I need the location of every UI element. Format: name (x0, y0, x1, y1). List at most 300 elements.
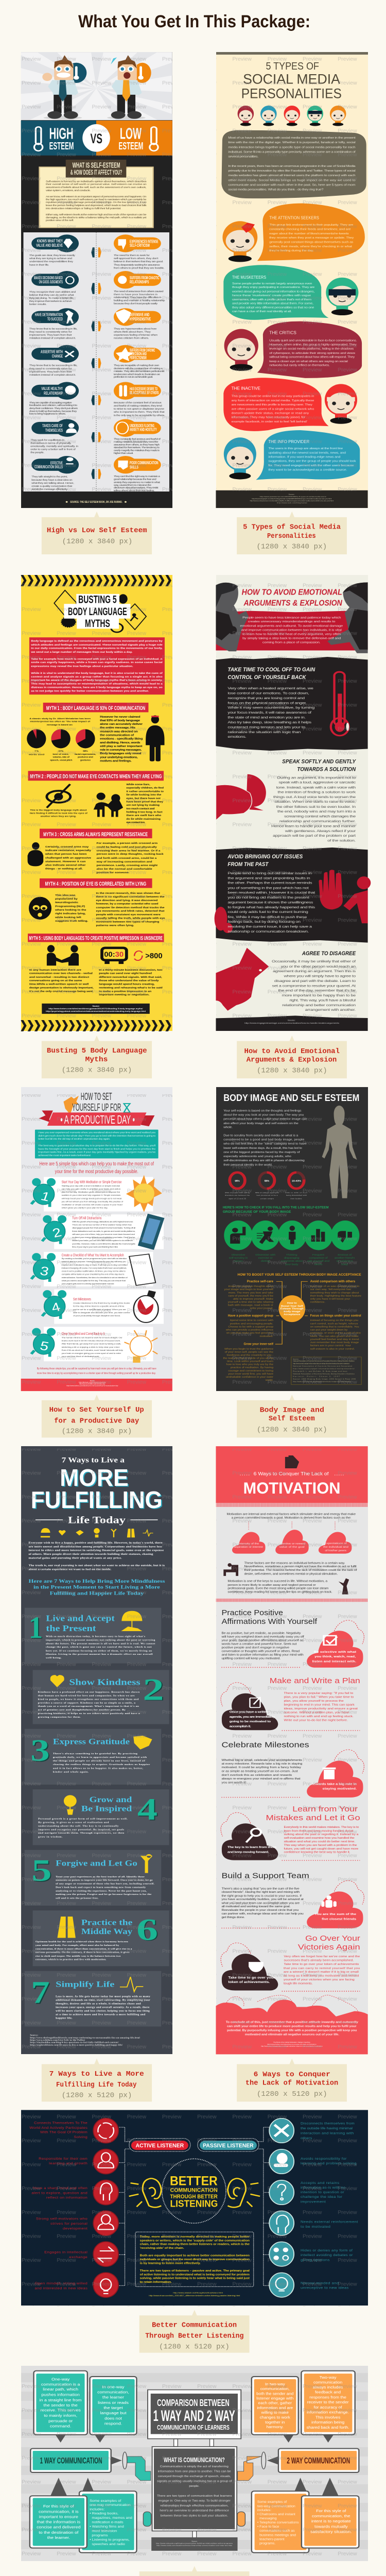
donut charts: 10-43% (292, 1180, 302, 1182)
green captions: Obsession with (255, 1254, 275, 1257)
intro blob: other more easily. Social Media brings us huge impact on the way we used to (228, 179, 356, 182)
active listener traits: and interested in new ideas (34, 2286, 87, 2290)
myth 1 (27, 703, 165, 762)
box: two-way style: satisfactory situation. (310, 2530, 352, 2534)
section: past issues: resolving the current issue, it can help save a (227, 924, 312, 928)
way 4: 4 (138, 1792, 159, 1827)
section: cool off: Very often when a heated argument arise, we (227, 686, 313, 690)
panel: busting 5 body language myths: MYTH 2 : PEOPLE DO NOT MAKE EYE CONTACTS WHEN THEY ARE LYING (30, 773, 162, 779)
green heading: GROUP BECAUSE OF YOUR BODY IMAGE (223, 1211, 291, 1214)
myth 5: people can send over eight hundred (99, 972, 152, 975)
myth 4: movement between two types of changing (96, 921, 159, 923)
boost diagram: of your inner-self, people can see the (225, 1351, 273, 1353)
green captions: exercise or (258, 1257, 273, 1260)
caption: high vs low: High vs Low Self Esteem (47, 527, 147, 534)
tip 2 (41, 1214, 165, 1250)
tip 5: The human mind is not meant to work for 8 hours straight. Our (62, 1336, 122, 1338)
icon row (41, 1528, 153, 1537)
bubble text: musketeers continued, critics, inactive, info provider: http://www.entrepreneur.com/socialmedia/the-6-different-types-of-social-media-users-which-one-are-you.html (250, 500, 334, 502)
section: speak softly: the intention of finding a solution to work (278, 790, 356, 794)
caption: fulfilling life (42, 2059, 152, 2102)
tip 2: tackled your tasks, you can set a little reward system to do whatever (72, 1240, 133, 1242)
caption: fulfilling life: Fulfilling Life Today (56, 2080, 136, 2089)
intro blob: In the recent years, there has been an enormous progression in the use of Social Media (228, 165, 356, 168)
heading: SOCIAL MEDIA (243, 71, 341, 87)
way 3: chasing the endless things to acquire. Gratitude makes us happier (53, 1764, 150, 1766)
active listener traits: Engages in intellectual (44, 2250, 87, 2254)
traits row 1 and 2: believe in themselves that they are good. (114, 261, 164, 263)
bubble text: musketeers continued, critics, inactive, info provider: for. They need engagement with the other users because (268, 464, 354, 467)
tip: learn from mistakes: future, you will not get caught down and have more (284, 1848, 359, 1851)
tip 2: you'd like. However, make a commitment to allocate the most energetic (72, 1243, 135, 1245)
traits rows 2 to 7: receive criticism from others. (114, 337, 149, 340)
source (149, 2292, 240, 2297)
section: agree to disagree: AGREE TO DISAGREE (302, 951, 356, 956)
way 1: about the future. The present moment is all we have and it is real. We cannot (46, 1643, 155, 1645)
box: one-way examples: • Watching films and (90, 2525, 124, 2529)
boost diagram: can put your weight down by (310, 1329, 348, 1331)
intro blob: time with the rise of the digital age. Whether it is purposeful, fanatical or lofty, social (228, 141, 356, 144)
box: two-way learner: communication, (260, 2386, 290, 2391)
active listener traits: alert to explore, question and (31, 2191, 87, 2195)
box: one-way style: to the destination of (39, 2530, 79, 2535)
traits rows 2 to 7: good relationship because the fear and (114, 478, 156, 481)
sign: title: COMMUNICATION OF LEARNERS (157, 2424, 230, 2432)
green captions: or celebrity's (337, 1260, 353, 1263)
myth 5 (28, 934, 164, 996)
conclusion clouds: The Book of the Global Motivation, Dialogs Coaching (273, 2041, 310, 2043)
heading: PERSONALITIES (241, 86, 342, 101)
section: past issues: could only adds fuel to the current burning (227, 910, 308, 914)
intro blob: media interaction brings together a specific type of social media personality for each (228, 146, 356, 149)
bubble text: musketeers continued, critics, inactive, info provider: doesn't update their status, exchange or read any (232, 412, 309, 415)
green heading: HERE'S HOW TO CHECK IF YOU FALL INTO THE LOW SELF-ESTEEM (223, 1206, 329, 1209)
intro dotted box: is by learning to listen more effectively. (140, 2262, 201, 2265)
boost diagram: Each one of us was created unique in (310, 1285, 359, 1288)
tip 1 (30, 1175, 162, 1212)
source box: http://www.forbes.com/sites/carolkinseygoman/2012/07/24/busting-5-body-language-myths/ (48, 1008, 143, 1010)
box: one-way definition: receive. This serves (40, 2408, 81, 2413)
box: one-way examples: • Listening to programs, (90, 2538, 130, 2541)
box: one-way definition: communication is a (41, 2382, 80, 2386)
box: two-way definition: information exchange. (307, 2410, 349, 2414)
traits row 1 and 2: MAKES DECISIONS BASED (34, 276, 63, 280)
myth 2: it rather uncomfortable to (126, 790, 164, 793)
myth 1: A classic study by Dr. Albert Mehabrian has been (29, 718, 91, 720)
explanatory text: person is more likely to scatter away and neglect personal or (227, 1584, 316, 1587)
intro text: their personal identity in the world. (223, 1164, 273, 1166)
tip 1: you off but refresh you from lethargy. Eventually, this practice of (62, 1200, 124, 1202)
traits rows 2 to 7: mistakes instead of complain about it. (29, 374, 76, 377)
title (31, 1456, 164, 1526)
traits rows 2 to 7: THEMSELVES (45, 428, 63, 433)
intro dotted box: to retain information. (140, 2280, 172, 2284)
bubble: attention seekers: they receive when they post a message or update. They (269, 236, 354, 240)
donut charts: their bodies (290, 1198, 302, 1199)
intro teal box: better but fall into the old trap of another unproductive day again. (38, 1138, 110, 1141)
myth 4: people with consistent eye movement were (96, 913, 161, 916)
tip: make a plan: beginning to end in your mind. This can spark (284, 1703, 355, 1706)
tip: learn from mistakes: learn from them and keep moving forward. Avoid (284, 1830, 353, 1833)
source box: Source: (92, 1006, 100, 1007)
myth 3: Certainly, crossed arms may (45, 846, 89, 849)
donut charts (225, 1173, 307, 1199)
tip: victories text: tough life moments. (284, 1982, 313, 1985)
explanatory text: Motivation is one of the keys to succeed in life. Without motivation, a (227, 1580, 328, 1583)
tip: make a plan: plan, you allow yourself to process the (284, 1700, 344, 1703)
way 1: here yet. If we continue focusing on either of them, we're merely living an (46, 1650, 152, 1652)
traits rows 2 to 7: TAKES CARE OF (42, 423, 63, 429)
tip 5: your brain re-energize giving you a new spurt of zest to enter (62, 1352, 121, 1354)
box: two-way examples: • Telephone conversations (257, 2521, 299, 2524)
tip: affirmations: listen and interact with. (312, 1660, 356, 1663)
passive listener traits: giving opinions (301, 2258, 330, 2262)
traits rows 2 to 7: standard for themselves. The tendency to (114, 447, 160, 449)
way 6 (33, 1910, 169, 1966)
title ribbon (39, 1091, 154, 1126)
traits rows 2 to 7: SKILLS (130, 465, 138, 469)
source box: National Association of Anorexia Nervosa and Associated (293, 1365, 352, 1367)
traits row 1 and 2: self-approval from others, they don't (114, 258, 159, 260)
myth 2: holding it too long. In fact (126, 811, 163, 814)
source box: Source: (191, 2540, 198, 2543)
box: one-way definition (34, 2371, 87, 2435)
bubble text: musketeers continued, critics, inactive, info provider: worried about giving out personal information to strangers, (232, 290, 315, 293)
tip: support team: five closest friends (322, 1918, 357, 1921)
icon: phone (138, 1214, 165, 1250)
intro text: Due to scrutiny from society and media on what is a (223, 1134, 299, 1137)
tip: victories text: yourself of your victories when you are facing (284, 1978, 355, 1981)
icon: clipboard (129, 1254, 155, 1285)
section: speak softly: the other follows suit to be even louder. In (276, 805, 356, 808)
way 4: Grow and (90, 1795, 132, 1804)
way 3: There's always something to be grateful for. By practicing (53, 1753, 138, 1755)
source box: http://www.study.com/academy/lesson/improving-communication-one-way-two-way (156, 2545, 232, 2546)
box: one-way learner: the target (103, 2406, 123, 2410)
intro and factor clouds: the individual and (323, 1546, 348, 1549)
title: FULFILLING (31, 1486, 163, 1513)
caption: body image: Self Esteem (269, 1415, 315, 1422)
intro red box: smile can signify happiness, while a frown can signify sadness. In some cases facial (31, 662, 163, 664)
title with road signs (54, 590, 146, 632)
tip 3: cross it out to positive reaffirmation. At times, you may not be able to (62, 1270, 126, 1272)
myth 1: emotions - specifically liking (100, 738, 143, 740)
box: what is communication: engage in: One-way or Two-way. To build stronger (159, 2500, 231, 2502)
myth 5: conversations going on at the same (29, 979, 82, 982)
tip: make a plan: There is a very popular saying: "If you fail to (284, 1692, 354, 1695)
boost diagram: Just remember that most body image (310, 1342, 359, 1344)
boost diagram: When you begin to trust the guidance (224, 1348, 273, 1350)
text block: what is self-esteem: into destructive relationships or failing to fulfil their full potential. (46, 208, 121, 210)
traits rows 2 to 7: RELATIONSHIP (44, 391, 63, 396)
bubble text: musketeers continued, critics, inactive, info provider: updating about the newest social trends, news, and (268, 451, 346, 454)
tip: learn from mistakes (221, 1805, 360, 1860)
way 4: Be Inspired (81, 1804, 132, 1814)
myth 3: person were in deep thoughts, rocking back (96, 853, 164, 856)
intro teal box: have the foresight of your process for the next day from start to finish and helps you to prioritize the (38, 1148, 156, 1150)
traits rows 2 to 7: order to carry a better self in front of (30, 448, 76, 451)
box: two-way examples: includes: (257, 2509, 271, 2512)
myth 5: and nonverbal - resulting in two distinct (29, 976, 89, 979)
passive listener pill (198, 2139, 259, 2151)
way 1: important, which is present moment; not sulking about the past or worrying (46, 1639, 155, 1641)
myth 2: While some liars, (126, 784, 150, 786)
explanatory text (223, 1562, 357, 1595)
box: one-way definition: persuade or (48, 2419, 73, 2423)
text block: what is self-esteem: Either way, self-esteem levels at the extreme high and low ends of the spectrum can be (46, 213, 147, 216)
boost diagram: heels. You can also groom and make (310, 1335, 359, 1338)
myth 2 (28, 771, 164, 824)
tip 3 (30, 1252, 155, 1286)
passive listener traits: Needs external reinforcement (301, 2220, 358, 2224)
boost diagram: our own way. Tell everyone has (310, 1289, 351, 1291)
traits rows 2 to 7: is the only way to be acceptable by others. (114, 414, 165, 417)
intro teal box: important tasks first. As a result, even if your day gets inevitably hijacked by urgent matters, you've (38, 1151, 156, 1154)
section: agree to disagree: Occasionally, it may be unlikely that either of (272, 959, 356, 963)
box: one-way examples: magazines, memos and (92, 2516, 132, 2520)
intro and factor clouds: of his/her peers (325, 1550, 346, 1552)
caption: better listening: Through Better Listening (145, 2332, 244, 2340)
box: two-way style: communication, the (312, 2514, 350, 2518)
way 3: kinder and whole again. (53, 1771, 89, 1773)
way 5: moments as points to improve your life forward. Once you've done, let go (56, 1879, 153, 1882)
myth 2: there are swift liars who (126, 815, 162, 817)
bubble text: musketeers continued, critics, inactive, info provider: leverage on social media platforms, hiding in the shadows (269, 347, 354, 350)
myth 1: motives and feelings. (100, 760, 132, 762)
boost diagram: Practice self-care (247, 1280, 273, 1283)
section: speak softly: speak with a loud, aggressive or sarcastic (278, 781, 356, 784)
section: past issues: argument because it shows the unwillingness (227, 901, 313, 904)
tip: affirmations: Affirmations With Yourself (221, 1617, 317, 1625)
intro and factor clouds: aspiration or interest (234, 1546, 263, 1549)
section: cool off: lose control of our emotions. To cool down, (227, 691, 309, 695)
tip: support team: can partner with, exchange ideas and who can help you (221, 1913, 304, 1916)
donut charts: 95% of people with eating (225, 1192, 250, 1194)
tip 5: Clear Your Mind and Come Back to It (62, 1332, 105, 1336)
way 3: Express Gratitude (53, 1737, 130, 1747)
way 6: 6 (136, 1912, 158, 1947)
tip: support team: the right group to help you is crucial to your success. If (221, 1895, 302, 1897)
intro blob: individual. Some fit into a personality type precisely, whereas some are a combination of (228, 150, 356, 154)
myth 4: This idea was (55, 894, 75, 897)
traits row 1 and 2: The goals are clear, they know exactly (29, 255, 75, 257)
conclusion clouds: can shift your entire life to produce more positive results and help you to fulfil your (227, 2025, 357, 2028)
myth 1: speech, vocal pitch (50, 759, 73, 761)
caption: avoid arguments: How to Avoid Emotional (244, 1047, 340, 1055)
box: two-way examples: teachers-parent (259, 2538, 285, 2541)
traits rows 2 to 7: because they don't trust people easily (114, 302, 158, 305)
tip: celebrate milestones: or as simple as treating yourself an ice-cream. Just (221, 1770, 298, 1773)
way 2: practicing kindness, it helps us to see others more positively and have a (38, 1713, 140, 1715)
icon: right horn pipe (237, 2452, 266, 2526)
intro and factor clouds: Motivation are internal and external factors which stimulate desire and energy that make (227, 1513, 356, 1516)
way 6: Practice the (81, 1918, 132, 1927)
boost diagram: care of yourself, the more you'll be (229, 1295, 273, 1297)
way 3: 3 (30, 1733, 50, 1768)
passive listener traits: unreceptive to new ideas (301, 2286, 349, 2290)
green captions: mirrors (234, 1260, 243, 1263)
intro red box: distress in communication. Hence, here are 5 body language myths to keep an eye on, so (31, 686, 163, 689)
intro text: especially adolescents and young adults, who (223, 1156, 291, 1158)
traits rows 2 to 7: better results. (29, 303, 47, 306)
bubble: attention seekers: selfies, their meals, where they're checking in or what (269, 245, 352, 248)
text block: what is self-esteem (40, 160, 153, 228)
myth 1: the communication of (100, 734, 134, 737)
high vs low banner: ESTEEM (49, 141, 74, 152)
passive listener traits: learning and problem solving (301, 2161, 357, 2165)
way 1: change the past, which is gone nor can we control the future, which is not (46, 1647, 152, 1649)
tip: make a plan: agenda, you are immediately (230, 1716, 275, 1719)
active listener traits: reflect on information (46, 2196, 87, 2199)
myth 4: usually telling the truth, while people with eye (96, 917, 165, 920)
traits rows 2 to 7: the people. (30, 451, 44, 454)
comparison card: BE ACCEPTABLE BY OTHERS (130, 391, 159, 395)
tip 1: which gives you clarity in your plan for the day. (62, 1207, 108, 1209)
way 4: grow in wisdom. (38, 1836, 62, 1838)
box: two-way learner: changes to work (260, 2415, 290, 2420)
bar: 1 way communication: 1 WAY COMMUNICATION (40, 2456, 102, 2465)
box: what is communication: between these two styles to suit your situation. (161, 2515, 228, 2517)
caption: motivation: the Lack of Motivation (245, 2079, 338, 2087)
intro text: perceive about how others judge your exterior image can (223, 1118, 307, 1121)
text block: what is self-esteem: assortment of beliefs about the self, such as the assessment of one's own outlook, (46, 187, 147, 189)
caption: body image (237, 1395, 347, 1437)
box: two-way examples: messaging (259, 2517, 277, 2520)
bubble text: musketeers continued, critics, inactive, info provider: they want to be acknowledged as a credible source. (268, 468, 347, 471)
tip: support team: There's also a saying that "you are the sum of the five (221, 1888, 300, 1890)
caption: busting myths (42, 1036, 152, 1078)
myth 4: MYTH 4 : POSITION OF EYE IS CORRELATED WITH LYING (45, 880, 146, 887)
text block: what is self-esteem: As we know, self-esteem is an important aspect of personal success and happiness. On (46, 195, 147, 198)
bubble: attention seekers: generally post constant things about themselves such as (269, 241, 353, 244)
passive listener traits: Hides or denies any form of (301, 2249, 353, 2252)
traits rows 2 to 7: they need to consistently strive for (29, 367, 72, 370)
way 7: additional demands on time, start subtracting. By simplifying your (56, 1999, 151, 2002)
intro red box: as to not judge too quickly for better communication between you and another. (31, 690, 149, 692)
myth 4: while looking left (55, 916, 81, 919)
boost diagram: world. (266, 1379, 273, 1382)
section: speak softly: situation. When one starts to raise its voice, (274, 800, 356, 804)
donut charts: ages of 12 and 25 (229, 1198, 246, 1199)
traits rows 2 to 7: SUFFERS FROM CHRONIC (130, 348, 155, 352)
traits rows 2 to 7: experiences feeling of intense when (114, 334, 157, 336)
tip: learn from mistakes: Learn from Your (292, 1805, 358, 1813)
boost diagram: the real you that is inside of you all the (223, 1357, 273, 1360)
traits rows 2 to 7: others think about them. They (114, 331, 151, 333)
tip: affirmations: Be selective with what (314, 1651, 357, 1653)
intro red box: important be aware of the dangers of body language myths that's been arising in society. (31, 679, 163, 682)
caption: motivation: (1280 x 5120 px) (257, 2090, 327, 2098)
tip: learn from mistakes: sulking about the past or regretting it. Instead try a (284, 1834, 359, 1836)
tip: affirmations: uplifting content will keep you motivated. (221, 1657, 281, 1660)
boost diagram: unshakable confidence in your outer (226, 1376, 273, 1379)
box: one-way style: For this style of (43, 2504, 75, 2509)
bubble text: musketeers continued, critics, inactive, info provider: example facebook, in order not to feel 'left behind' (232, 420, 307, 423)
boost diagram: on you that make you feel good and (226, 1332, 273, 1334)
box: one-way learner: In one-way (102, 2385, 125, 2389)
way 5: analyzing or re-visiting the experience. Never let the past haunt you, (56, 1890, 147, 1892)
way 3: and it in fact allows us to be happier. It also makes us, better, (53, 1768, 144, 1770)
box: two-way style: For this style of (316, 2509, 346, 2513)
bubble text: musketeers continued, critics, inactive, info provider (216, 290, 368, 508)
myth 1: the entire message. His (100, 727, 136, 730)
subheading (40, 1161, 154, 1174)
text block: what is self-esteem: repulsive and possibly damage personal relationships. On the low spectrum, it can (46, 201, 147, 204)
intro red box: While it is vital to understand the body language, but it is also crucial to take the cues of (31, 672, 163, 675)
way 4: Personal growth is a great form of self-improvement as well. (38, 1818, 128, 1820)
traits rows 2 to 7: deny their confidence. They don't put others (29, 408, 78, 410)
source box (42, 1004, 150, 1014)
source: http://tinybuddha.com/blog/4-key-questions-to-feel-fully-fulfilled-and-content/ (30, 2041, 119, 2044)
section: speak softly: the end, nobody wins and may turn into a (277, 809, 356, 814)
section: agree to disagree: where you will simply have to agree to (283, 974, 356, 978)
source: http://www.sklatch.net/thoughts/ethos/listen.html (173, 2292, 223, 2294)
way 4: understanding about the self. The key is to continually (38, 1825, 119, 1827)
tip: support team: all motivated and working toward the same goal. (221, 1906, 291, 1908)
dotted connectors (119, 2127, 269, 2285)
source box: Ricciardelli, L. and McCabe, M. Body image and boys (293, 1370, 347, 1372)
box: one-way style: important to ensure (39, 2515, 78, 2519)
myth 3: when that person has been (45, 853, 86, 856)
section: agree to disagree: right. This way, you'll have a blissful (289, 998, 356, 1002)
traits rows 2 to 7 (29, 283, 165, 492)
section: past issues: feelings back, but by doing focusing on (227, 920, 301, 924)
box: two-way learner: each other, gather (258, 2401, 292, 2405)
tip 2: disengaged people from their present moment and tasks. Turning off all (72, 1227, 135, 1229)
caption: better listening (139, 2310, 250, 2353)
traits rows 2 to 7: EFFECTIVE (50, 461, 63, 466)
tip: make a plan: accomplish it. (230, 1725, 251, 1728)
bubble text: musketeers continued, critics, inactive, info provider: This group could be online but in no way participates in (232, 395, 314, 398)
source line: SOURCE: THE SELF ESTEEM BOOK, DR JOE RUBINO. (70, 501, 122, 504)
intro blob: Most of us have a relationship with social media in one way or another in the present (228, 137, 356, 140)
tip: affirmations (221, 1608, 364, 1668)
boost diagram: Avoid comparison with others (310, 1280, 355, 1283)
bubble text: musketeers continued, critics, inactive, info provider: Usually quiet and unnoticeable in face-to-face conversations. (269, 339, 357, 342)
myth 5: 00:30 (104, 951, 124, 959)
caption: productive day: How to Set Yourself Up (49, 1406, 144, 1414)
panel: body image and self esteem (216, 1087, 368, 1398)
myth 3 continued: persistence. Lastly, crossing arms might (96, 865, 157, 867)
traits rows 2 to 7: perfection is not an achievable goal. (114, 376, 153, 379)
tip: celebrate milestones: staying motivated. (323, 1787, 357, 1790)
traits rows 2 to 7: They know that to be succeeding in life, (29, 364, 78, 367)
myth 3: MYTH 3 : CROSS ARMS ALWAYS REPRESENT RESISTANCE (43, 831, 148, 837)
high vs low banner: LOW (120, 125, 142, 142)
tip: victories heading: Take time to go over your token of achievements (284, 1963, 359, 1966)
myth 1: role in conveying messages. (100, 749, 142, 752)
green captions: Envious of (338, 1254, 352, 1257)
box: one-way examples: • Reading books, (90, 2512, 118, 2516)
tip 5: After that interval, get away from your desk by taking a walk, (62, 1343, 121, 1345)
way 6: concentration, if there is more effort than concentration, it will give rise to a (36, 1948, 132, 1951)
passive listener traits: improvement (301, 2200, 326, 2204)
section: cool off: recognize that you are losing control and (227, 696, 305, 700)
part 1 (216, 582, 368, 842)
tip: learn from mistakes: and keep moving forward. (227, 1851, 269, 1854)
active listener traits: Solving (74, 2135, 87, 2139)
box: one-way learner: communication, (97, 2390, 129, 2394)
bubble text: musketeers continued, critics, inactive, info provider: suggestions, they are the group of people you should look (268, 460, 357, 463)
text block: what is self-esteem: the high spectrum, too much self-esteem can lead to narcissism which can certainly be (46, 198, 147, 201)
box: one-way examples (79, 2491, 136, 2553)
header with red intro band: and improve communication between two individuals, it is vital (241, 629, 342, 632)
tip: celebrate milestones (221, 1741, 364, 1798)
traits row 1 and 2: KNOWS WHAT THEY (37, 239, 63, 243)
text block: what is self-esteem: value system, emotions, and conducts. (46, 190, 91, 192)
intro text: self-discriminates as they are still in phases of discovering (223, 1160, 305, 1162)
way 7: at a time to achieve more and live towards a more fulfilling and (56, 2013, 145, 2016)
